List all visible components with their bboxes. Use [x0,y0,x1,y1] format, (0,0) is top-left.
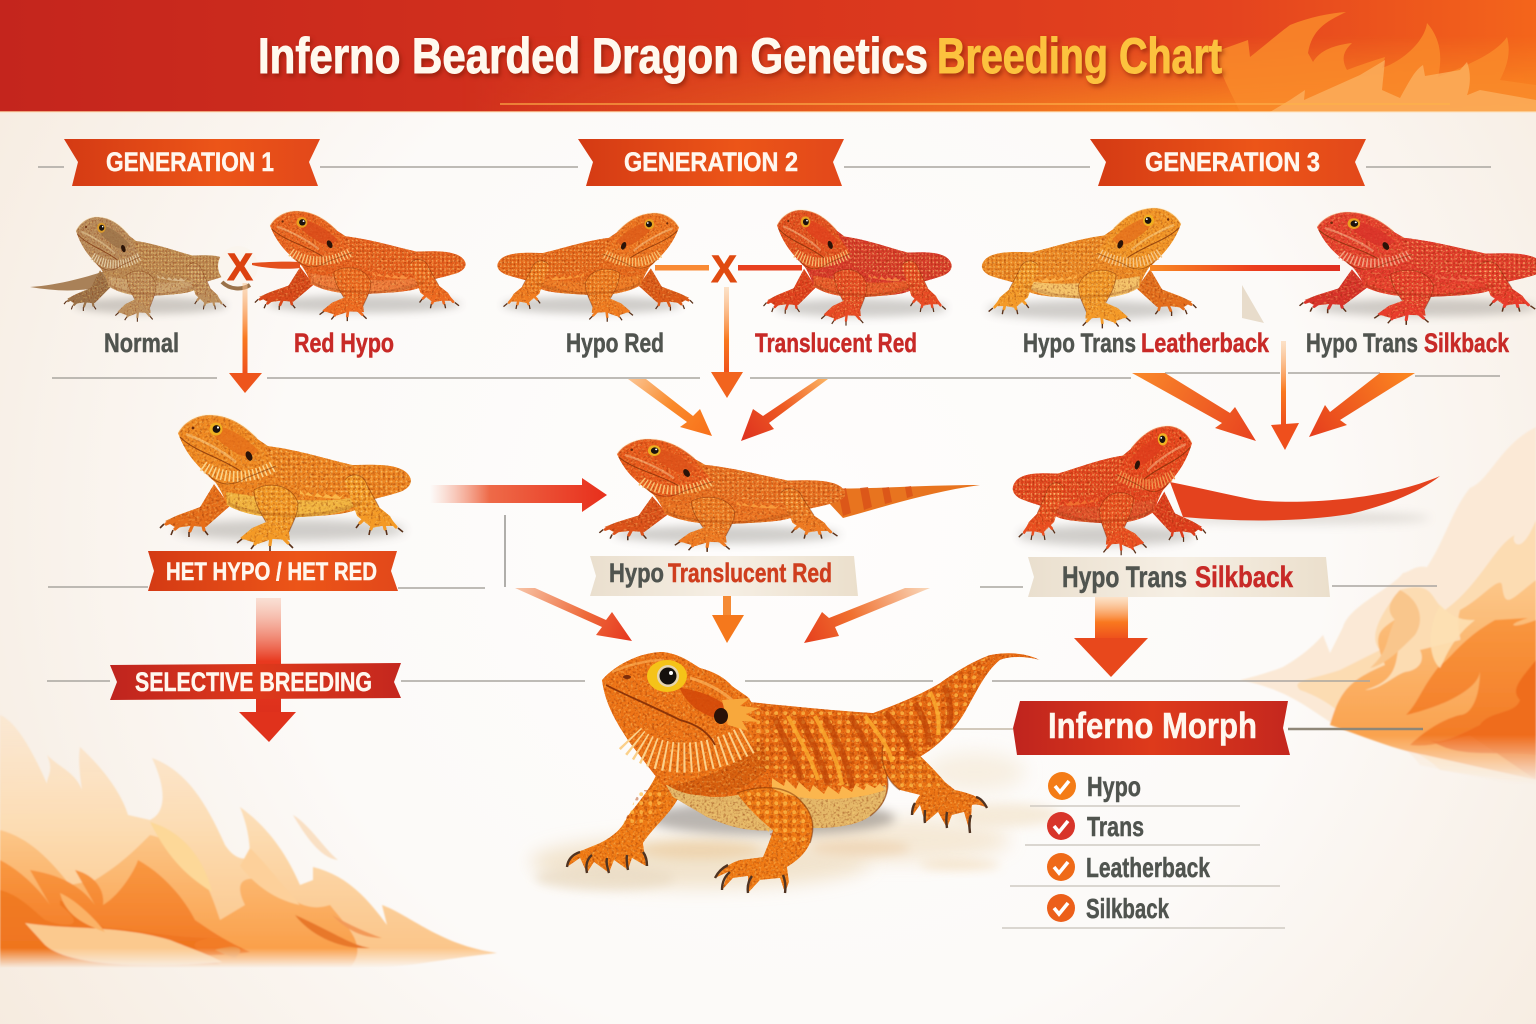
trait list [1002,771,1285,928]
arrow: hypo red to hypo translucent red [628,379,712,436]
arrow: silkback to inferno morph [1074,597,1148,677]
label: hypo trans silkback: Silkback [1424,328,1510,358]
label: hypo trans leatherback: Leatherback [1141,328,1270,358]
lizard: het hypo / het red [160,415,411,551]
plate: hypo translucent red: Translucent Red [668,558,832,588]
plate: hypo translucent red: Hypo [609,558,664,588]
banner: generation 2 [578,139,844,186]
plate: hypo trans silkback: Silkback [1195,561,1293,594]
banner: het hypo / het red [148,551,398,591]
trait: trans [1047,811,1144,842]
arrow: leatherback to silkback offspring [1132,373,1256,441]
breeding bar: generation 3 [1150,265,1340,271]
arrow: het to hypo translucent red [430,478,607,512]
trait: silkback [1047,893,1169,924]
banner: generation 3: GENERATION 3 [1145,147,1320,177]
banner: inferno morph: Inferno Morph [1048,705,1257,746]
lizard: red hypo [255,211,466,321]
lizard: hypo translucent red [599,439,980,552]
trait: hypo [1048,771,1141,802]
arrow: grey line into inferno [515,588,632,641]
plate: hypo translucent red [590,556,858,596]
label: normal: Normal [104,328,179,358]
arrow: translucent red to hypo translucent red [741,379,828,441]
header bar [0,0,1536,112]
marker: small beige triangle [1242,285,1264,323]
arrow: hypo translucent red to inferno [712,596,744,643]
banner: selective breeding: SELECTIVE BREEDING [135,667,372,697]
arrow: generation 3 down [1271,341,1299,450]
banner: generation 2: GENERATION 2 [624,147,798,177]
banner: generation 1: GENERATION 1 [106,147,274,177]
plate: hypo trans silkback: Hypo Trans [1062,561,1187,594]
cross symbol: generation 1 [218,246,300,289]
banner: inferno morph [1013,701,1290,755]
banner: selective breeding [110,663,401,700]
lizard: hypo trans silkback [1300,212,1536,325]
trait: trans: Trans [1087,811,1144,842]
label: hypo red: Hypo Red [566,328,664,358]
plate: hypo trans silkback [1028,557,1330,597]
lizard: hypo red [497,213,693,322]
label: hypo trans leatherback [1023,328,1270,358]
banner: generation 3 [1090,139,1366,186]
label: red hypo: Red Hypo [294,328,394,358]
flames: bottom left [0,715,497,972]
arrow: silkback to silkback offspring [1309,373,1415,437]
trait: hypo: Hypo [1087,771,1141,802]
cross symbol: generation 2 [655,249,802,291]
cross symbol: generation 2: X [711,249,737,291]
ground patches under main lizard [530,752,1060,890]
arrow: generation 1 cross to het [229,283,262,393]
cross symbol: generation 1: X [227,247,253,289]
title: Breeding Chart [937,28,1222,84]
trait: silkback: Silkback [1086,893,1169,924]
lizard: hypo trans silkback offspring [1013,426,1440,555]
title: Inferno Bearded Dragon Genetics [258,28,928,84]
generation divider lines [38,167,1500,729]
trait: leatherback: Leatherback [1086,852,1210,883]
trait: leatherback [1047,852,1210,883]
arrow: right side into inferno [804,588,930,643]
label: translucent red: Translucent Red [755,328,917,358]
flames: right side [1240,427,1536,790]
label: hypo trans leatherback: Hypo Trans [1023,328,1136,358]
lizard: normal [30,217,231,322]
lizard: hypo trans leatherback [982,208,1196,328]
lizard: inferno morph hero [567,652,1040,893]
arrow: het to selective breeding [239,598,296,742]
arrow: generation 2 cross down [711,287,743,398]
banner: het hypo / het red: HET HYPO / HET RED [166,558,377,586]
lizard: translucent red [764,210,952,326]
banner: generation 1 [64,139,320,186]
label: hypo trans silkback: Hypo Trans [1306,328,1418,358]
